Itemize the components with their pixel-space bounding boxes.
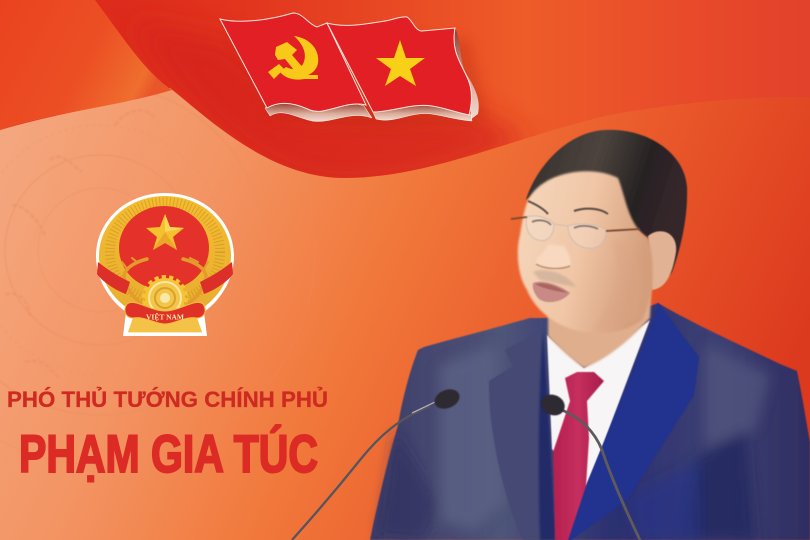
- emblem banner with country name: VIỆT NAM: [146, 312, 184, 322]
- necktie: [553, 372, 604, 540]
- emblem outer ring: [96, 193, 234, 336]
- nose: [536, 244, 571, 269]
- faint bronze drum pattern: [0, 35, 315, 465]
- emblem red side ribbons: [97, 262, 130, 294]
- national emblem: [96, 193, 234, 336]
- neck: [548, 280, 652, 368]
- mouth: [533, 282, 570, 302]
- face shading: [592, 240, 641, 331]
- face: [518, 171, 653, 333]
- right lapel: [567, 303, 699, 540]
- left lapel: [489, 330, 556, 540]
- hair back: [526, 130, 687, 283]
- suit shading: [378, 345, 770, 540]
- subtitle: PHÓ THỦ TƯỚNG CHÍNH PHỦ: [7, 387, 328, 412]
- left lapel inner shadow: [539, 330, 556, 540]
- suit: [370, 303, 810, 540]
- eyes: [532, 220, 598, 229]
- portrait of speaker: [370, 130, 810, 540]
- ear: [648, 231, 676, 290]
- icon: hammer and sickle: [268, 36, 318, 80]
- emblem banner with country name: [125, 302, 205, 333]
- emblem ring ticks: [110, 202, 220, 302]
- emblem rice sheaves: [120, 258, 210, 304]
- left microphone: [292, 386, 462, 540]
- party flag: [220, 13, 372, 121]
- glasses: [526, 216, 606, 248]
- flags: party and national: [220, 13, 479, 121]
- shirt: [547, 320, 650, 486]
- name: PHẠM GIA TÚC: [19, 424, 318, 484]
- right microphone: [538, 391, 640, 540]
- moustache shadow: [533, 270, 576, 287]
- icon: yellow star: [376, 40, 425, 86]
- emblem star: [146, 214, 184, 250]
- flag shadow: [228, 30, 488, 128]
- emblem gear: [145, 278, 185, 318]
- emblem red disc: [119, 206, 209, 290]
- glasses temples: [511, 217, 640, 231]
- top left corner swoosh: [0, 0, 172, 130]
- top red wave band: [0, 0, 810, 190]
- eyebrows: [528, 201, 608, 214]
- national flag: [327, 17, 479, 121]
